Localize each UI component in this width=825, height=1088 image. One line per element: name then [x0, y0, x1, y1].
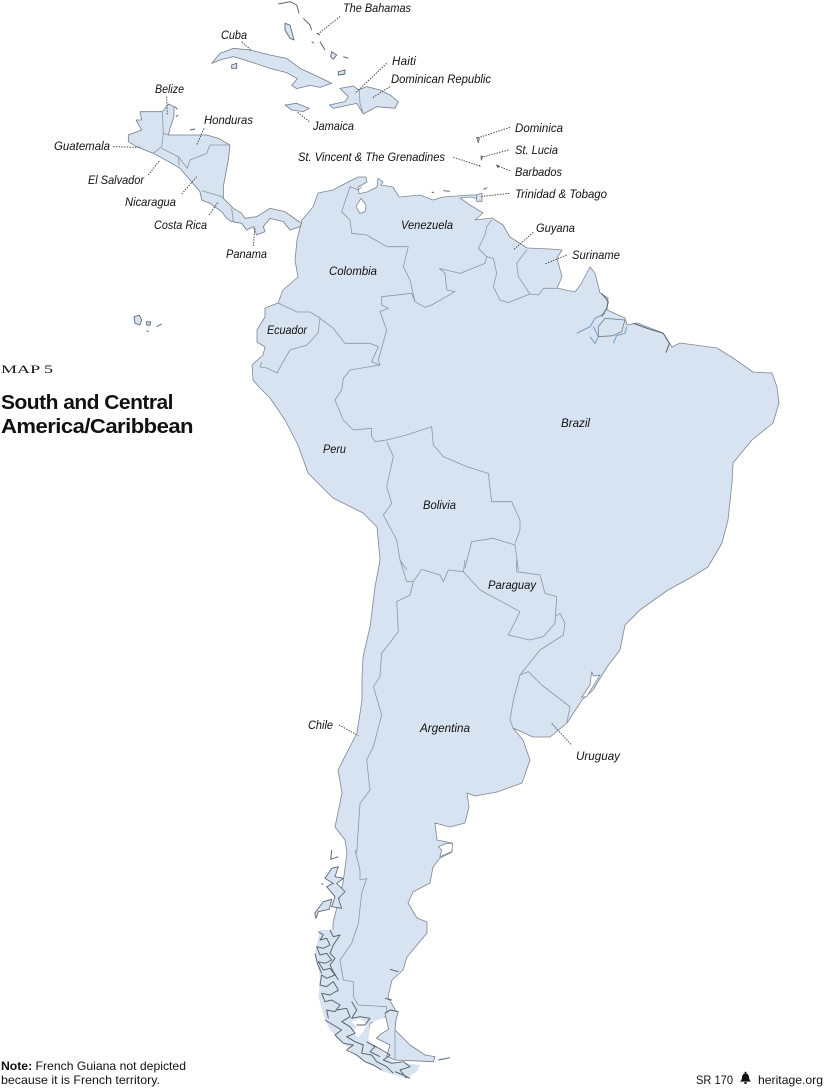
- country labels: [54, 2, 621, 763]
- country labels: Nicaragua: [125, 196, 177, 209]
- icon: liberty bell: [740, 1072, 751, 1084]
- source reference: SR 170: [696, 1073, 733, 1087]
- Caribbean islands: [134, 2, 499, 332]
- fjord scribbles: [315, 930, 450, 1078]
- country borders: southern South America: [357, 560, 570, 853]
- country labels: Barbados: [515, 166, 562, 179]
- country labels: Haiti: [392, 55, 416, 68]
- map number: MAP 5: [1, 364, 53, 376]
- islands: upper Chilean archipelago: [315, 850, 345, 918]
- country labels: Venezuela: [401, 219, 454, 232]
- note: [1, 1059, 186, 1087]
- title: America/Caribbean: [1, 415, 193, 438]
- map: South and Central America and Caribbean: [113, 2, 779, 1078]
- island: Tierra del Fuego: [377, 1010, 435, 1062]
- country borders: Patagonia: [340, 850, 387, 1012]
- country labels: St. Lucia: [515, 144, 559, 157]
- country labels: Panama: [226, 248, 268, 261]
- landmass: South America: [252, 177, 779, 1037]
- water: Amazon delta: [577, 293, 669, 353]
- country labels: Guatemala: [54, 140, 111, 153]
- water: Lake Maracaibo: [356, 198, 366, 213]
- islands: Bahamas and others: [175, 2, 348, 130]
- country labels: Costa Rica: [154, 219, 208, 232]
- country labels: Jamaica: [312, 120, 355, 133]
- country labels: El Salvador: [88, 174, 145, 187]
- archipelago base: [315, 930, 420, 1078]
- landmass: Central America: [128, 104, 302, 235]
- country labels: Chile: [308, 719, 334, 732]
- country labels: Dominica: [515, 122, 564, 135]
- country borders: northern South America: [320, 187, 557, 570]
- country labels: Colombia: [329, 265, 378, 278]
- title: South and Central: [1, 391, 173, 414]
- country labels: Cuba: [221, 29, 248, 42]
- country labels: Uruguay: [576, 750, 621, 763]
- water: Strait of Magellan channels: [352, 1017, 389, 1041]
- country labels: Suriname: [572, 249, 621, 262]
- note: Note: French Guiana not depicted: [1, 1059, 186, 1073]
- country labels: Argentina: [419, 722, 471, 735]
- water: Lagoa dos Patos: [438, 672, 600, 857]
- leader lines: [113, 17, 571, 744]
- note: because it is French territory.: [1, 1073, 160, 1087]
- country labels: Peru: [323, 443, 347, 456]
- title: [1, 391, 193, 438]
- country labels: St. Vincent & The Grenadines: [298, 151, 445, 164]
- country labels: Honduras: [204, 114, 253, 127]
- country labels: Guyana: [536, 222, 576, 235]
- country labels: Belize: [155, 83, 185, 96]
- island: Jamaica: [285, 103, 309, 112]
- country border: Ecuador: [260, 303, 320, 373]
- southern tip of the continent: [315, 930, 450, 1078]
- country labels: Bolivia: [423, 499, 457, 512]
- islands: Lesser Antilles: [432, 137, 499, 201]
- country labels: Ecuador: [267, 324, 308, 337]
- country labels: Trinidad & Tobago: [515, 188, 608, 201]
- island: Hispaniola: [329, 86, 398, 114]
- country labels: Dominican Republic: [391, 73, 491, 86]
- country labels: Brazil: [561, 417, 590, 430]
- island: Cuba: [212, 48, 332, 89]
- Central America borders: [153, 112, 233, 222]
- country labels: Paraguay: [488, 579, 537, 592]
- website: heritage.org: [758, 1073, 823, 1087]
- islands: Galapagos: [134, 315, 162, 332]
- country labels: The Bahamas: [343, 2, 411, 15]
